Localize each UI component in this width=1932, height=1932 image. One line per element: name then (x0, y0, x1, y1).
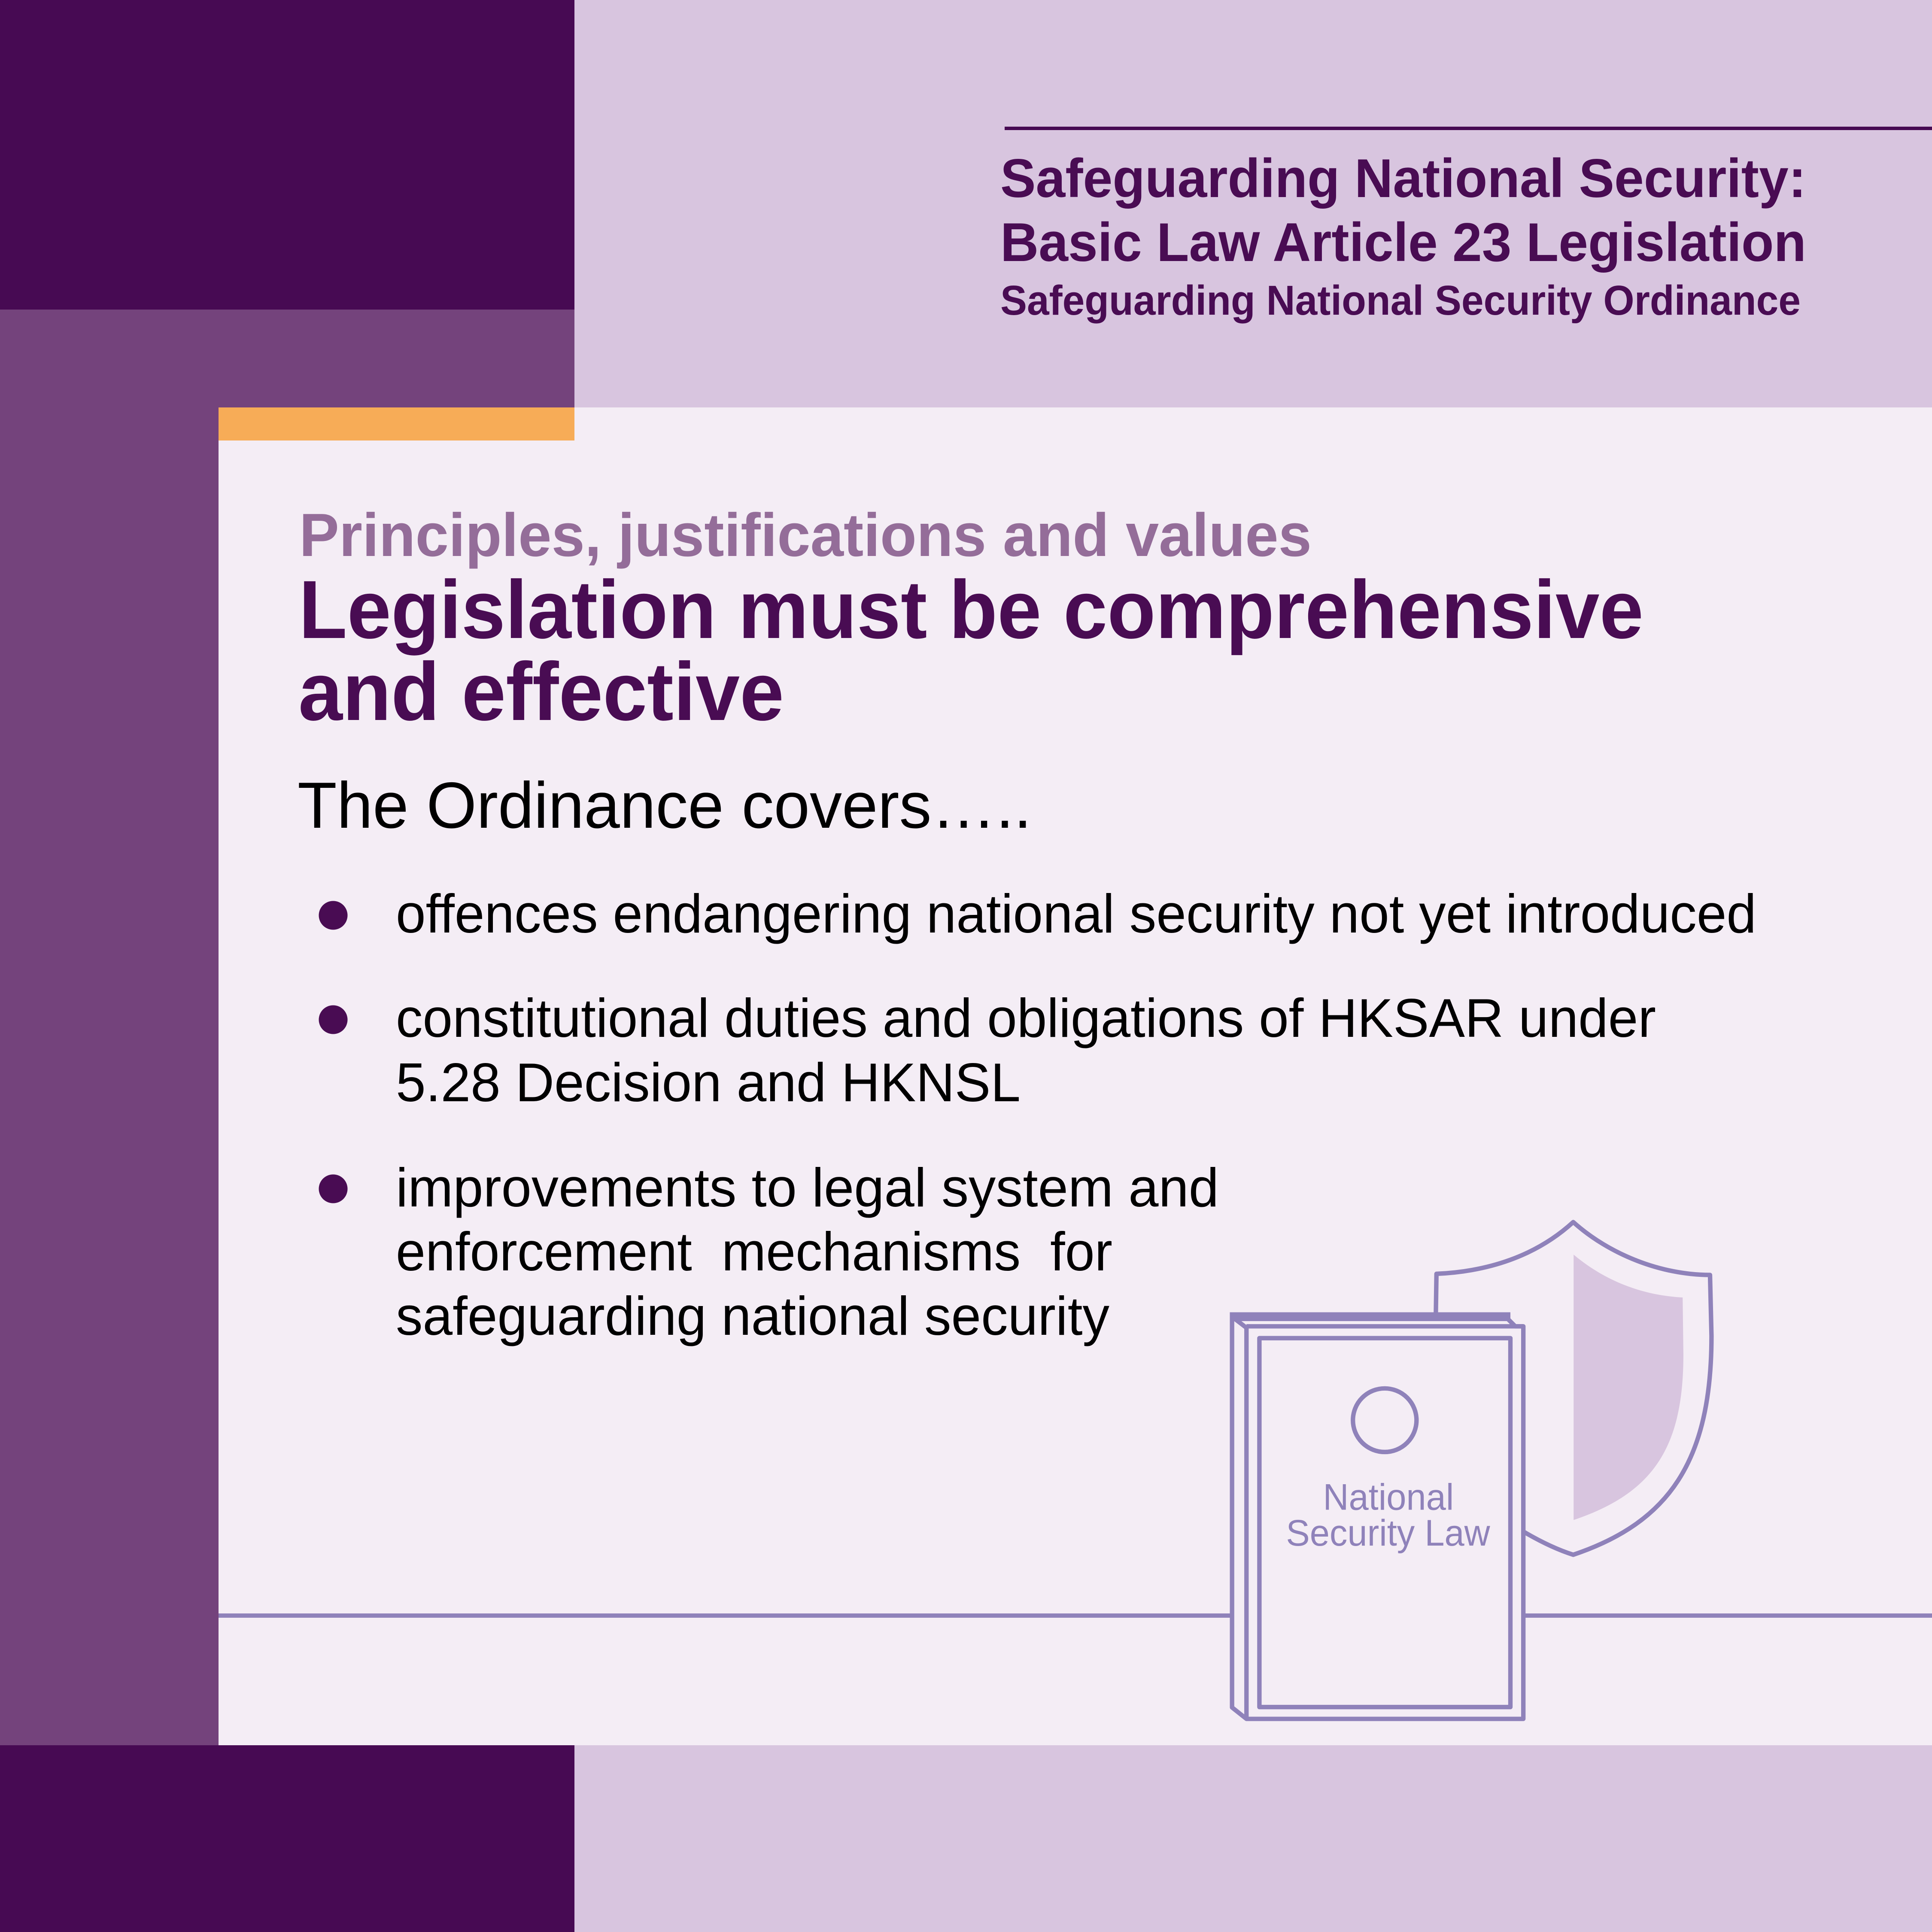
ground line (219, 1613, 1932, 1618)
panel: mid-purple frame (0, 310, 574, 1746)
bullet 3 text: safeguarding national security (396, 1285, 1109, 1346)
icon: book (1230, 1315, 1523, 1719)
bullet 3 text: enforcement mechanisms for (396, 1221, 1112, 1282)
book title: National (1323, 1476, 1454, 1518)
intro line: The Ordinance covers….. (298, 769, 1032, 842)
panel: bottom-left dark block (0, 1745, 574, 1932)
bullet 1 text: offences endangering national security not yet introduced (396, 883, 1756, 944)
main heading (298, 563, 1643, 738)
bullet 1 marker (319, 901, 348, 930)
bullet 2 marker (319, 1005, 348, 1034)
main heading line 2: and effective (298, 645, 784, 738)
bullet 3 text: improvements to legal system and (396, 1157, 1219, 1218)
bullet list (319, 883, 1756, 1346)
book title: Security Law (1286, 1513, 1490, 1554)
panel: top-right light header background (574, 0, 1932, 407)
main heading line 1: Legislation must be comprehensive (299, 563, 1643, 656)
header title line 1: Safeguarding National Security: (1000, 148, 1806, 209)
header rule (1005, 127, 1932, 130)
bullet 2 text: 5.28 Decision and HKNSL (396, 1052, 1021, 1113)
orange accent bar (219, 407, 574, 440)
book title (1286, 1476, 1490, 1554)
shield inner fill (1574, 1255, 1683, 1520)
bullet 3 marker (319, 1175, 348, 1203)
header title block (1000, 148, 1806, 324)
panel: main content background (219, 407, 1932, 1746)
header subtitle: Safeguarding National Security Ordinance (1000, 277, 1801, 324)
panel: top-left dark block (0, 0, 574, 310)
panel: bottom-right light block (574, 1745, 1932, 1932)
kicker heading: Principles, justifications and values (299, 501, 1312, 569)
bullet 2 text: constitutional duties and obligations of HKSAR under (396, 987, 1656, 1048)
bullet 3 text (396, 1157, 1219, 1346)
book emblem circle (1353, 1388, 1416, 1452)
icon: shield (1436, 1222, 1711, 1555)
header title line 2: Basic Law Article 23 Legislation (1000, 212, 1806, 273)
bullet 2 text (396, 987, 1656, 1113)
illustration: book and shield (1230, 1222, 1711, 1719)
